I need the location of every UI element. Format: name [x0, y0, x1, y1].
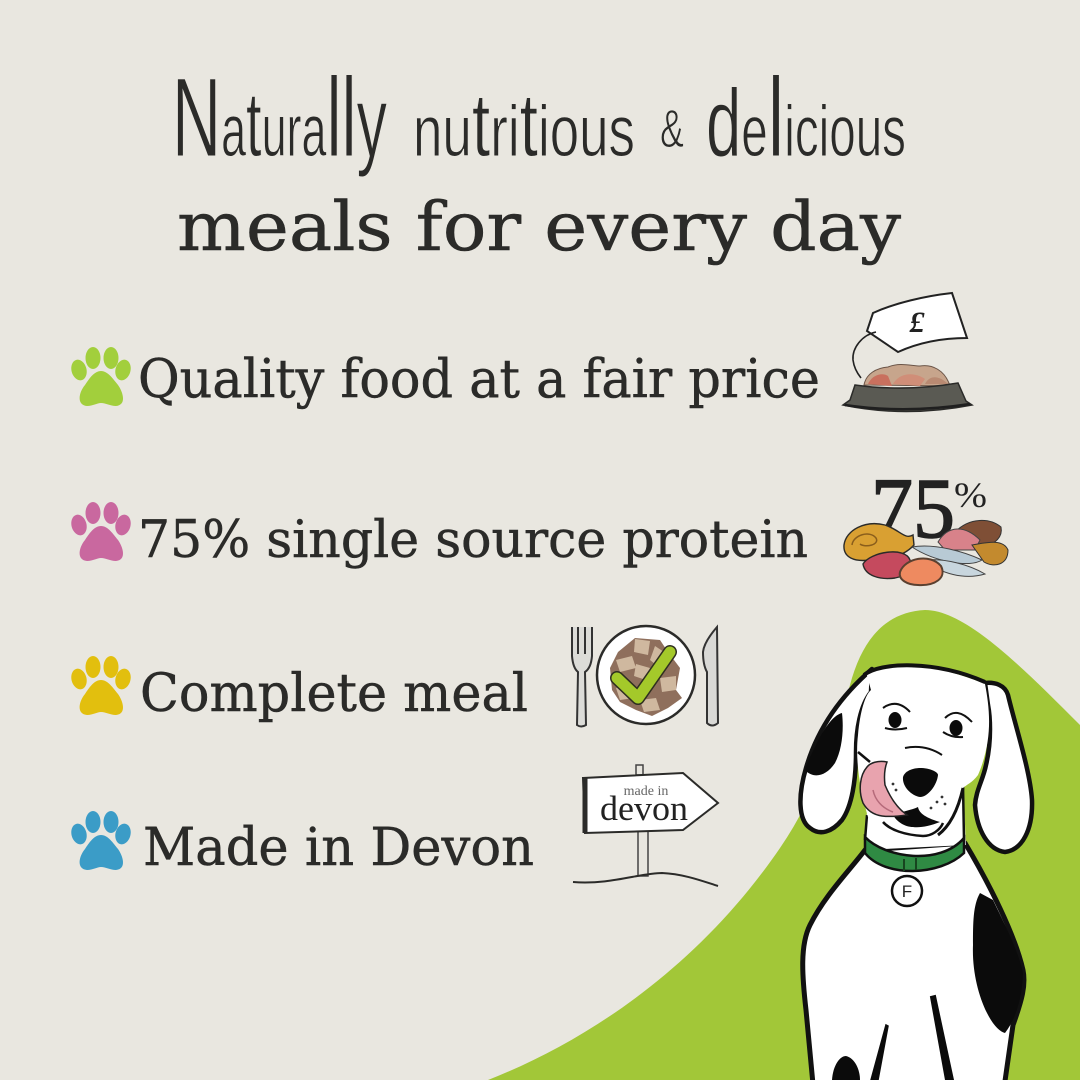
dog illustration [800, 665, 1032, 1080]
title: meals for every day [177, 188, 901, 266]
icon: made in devon signpost: devon [600, 789, 688, 828]
dog left ear [800, 669, 872, 832]
icon: 75 percent meat and fish: % [954, 475, 987, 515]
dog collar [865, 837, 964, 871]
icon: yellow paw [69, 656, 133, 715]
dog neck [864, 783, 966, 850]
dog body spots [832, 893, 1023, 1080]
list row: protein: 75% single source protein [138, 511, 808, 570]
icon: blue paw [69, 811, 133, 870]
dog body [803, 843, 1024, 1080]
icon: 75 percent meat and fish [844, 460, 1008, 585]
dog head [857, 665, 989, 836]
dog eyes and brows [883, 704, 972, 755]
icon: plate with cutlery and check [572, 626, 718, 726]
title: delicious [706, 55, 906, 180]
icon: made in devon signpost: made in [624, 784, 668, 799]
dog name tag [892, 876, 922, 906]
icon: price tag and food bowl: £ [908, 306, 926, 339]
dog name tag: F [902, 882, 912, 901]
dog tongue [860, 761, 907, 816]
title: Naturally [172, 55, 387, 180]
dog nose and mouth [883, 768, 946, 836]
dog right ear [975, 683, 1032, 852]
green background hill [488, 610, 1080, 1080]
icon: green paw [69, 347, 133, 406]
icon: pink paw [69, 502, 133, 561]
icon: made in devon signpost [573, 765, 718, 886]
title [172, 55, 906, 266]
list row: made in devon: Made in Devon [143, 818, 534, 878]
icon: price tag and food bowl [843, 293, 972, 412]
list row: complete meal: Complete meal [140, 664, 528, 724]
list row: quality food: Quality food at a fair price [138, 349, 820, 410]
title: & [660, 99, 684, 159]
icon: 75 percent meat and fish: 75 [871, 460, 955, 556]
title: nutritious [413, 76, 635, 176]
